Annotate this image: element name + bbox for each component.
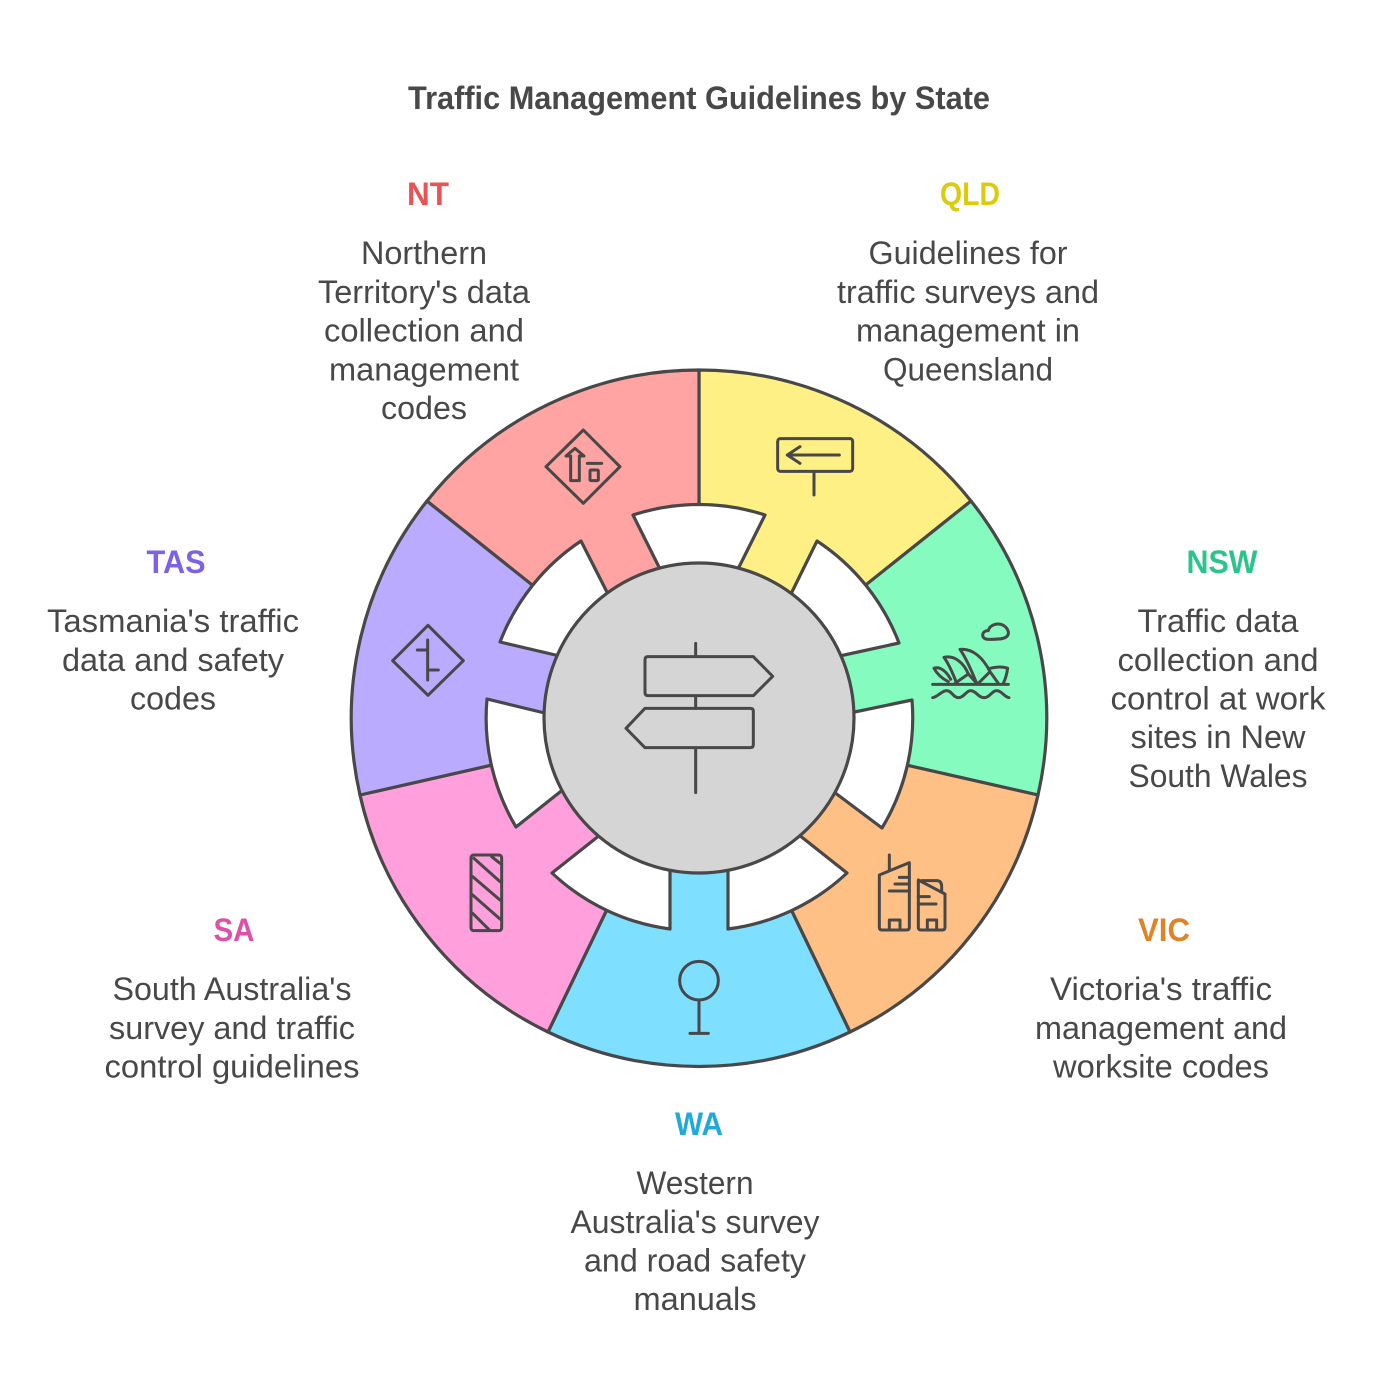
segment: TAS: [351, 501, 699, 795]
label: VIC: VIC: [1138, 912, 1190, 948]
notch: lower left: [486, 699, 570, 827]
label: TAS: Tasmania's traffic: [47, 603, 299, 639]
icon: QLD direction sign: [778, 439, 853, 495]
label: WA: WA: [675, 1106, 723, 1142]
icon: NSW opera house: [933, 624, 1009, 698]
label: NT: collection and: [324, 313, 524, 349]
label: TAS: data and safety: [62, 642, 284, 678]
icon: SA striped barrier: [471, 855, 502, 931]
notch: bottom left: [552, 831, 670, 929]
notch: top: [633, 505, 765, 575]
label: QLD: [837, 176, 1099, 387]
label: VIC: management and: [1035, 1010, 1287, 1046]
label: QLD: Queensland: [883, 351, 1053, 387]
title: Traffic Management Guidelines by State: [408, 80, 990, 116]
label: WA: Australia's survey: [570, 1204, 820, 1240]
label: NSW: [1110, 544, 1327, 794]
icon: WA sign post: [680, 961, 718, 1033]
label: NSW: collection and: [1118, 642, 1318, 678]
label: NT: NT: [407, 176, 449, 212]
label: QLD: QLD: [940, 176, 1000, 212]
icon: TAS road sign: [393, 625, 463, 695]
label: SA: control guidelines: [104, 1049, 360, 1085]
label: TAS: codes: [130, 681, 216, 717]
icon: NT road sign: [546, 430, 620, 503]
notch: upper left: [500, 541, 611, 657]
segment: QLD: [699, 370, 971, 718]
label: QLD: Guidelines for: [868, 235, 1068, 271]
label: VIC: [1035, 912, 1287, 1085]
segment: NT: [427, 370, 699, 718]
label: NT: Northern: [361, 235, 487, 271]
segment: SA: [360, 718, 699, 1032]
label: NT: codes: [381, 390, 467, 426]
segment: WA: [548, 718, 850, 1066]
label: VIC: Victoria's traffic: [1050, 971, 1272, 1007]
label: NT: Territory's data: [318, 274, 530, 310]
label: NSW: control at work: [1110, 681, 1327, 717]
notch: upper right: [788, 541, 899, 657]
label: WA: manuals: [634, 1281, 756, 1317]
segment: NSW: [699, 501, 1047, 795]
label: NT: [318, 176, 530, 426]
label: SA: SA: [214, 912, 254, 948]
label: SA: survey and traffic: [109, 1010, 355, 1046]
center hub: [544, 563, 854, 873]
wheel diagram: [351, 370, 1047, 1066]
label: SA: South Australia's: [112, 971, 352, 1007]
label: TAS: [47, 544, 299, 717]
label: WA: and road safety: [584, 1243, 806, 1279]
icon: central signpost: [626, 643, 773, 793]
label: NSW: sites in New: [1130, 719, 1306, 755]
notch: bottom right: [728, 831, 847, 929]
label: SA: [104, 912, 360, 1085]
label: QLD: traffic surveys and: [837, 274, 1099, 310]
label: QLD: management in: [856, 313, 1080, 349]
notch: lower right: [830, 700, 913, 828]
label: NSW: South Wales: [1128, 758, 1308, 794]
label: TAS: TAS: [146, 544, 206, 580]
label: NSW: NSW: [1186, 544, 1258, 580]
label: NSW: Traffic data: [1138, 603, 1299, 639]
label: WA: Western: [636, 1165, 754, 1201]
icon: VIC buildings: [879, 855, 945, 930]
label: NT: management: [329, 351, 519, 387]
label: WA: [570, 1106, 820, 1317]
label: VIC: worksite codes: [1052, 1049, 1269, 1085]
segment: VIC: [699, 718, 1038, 1032]
